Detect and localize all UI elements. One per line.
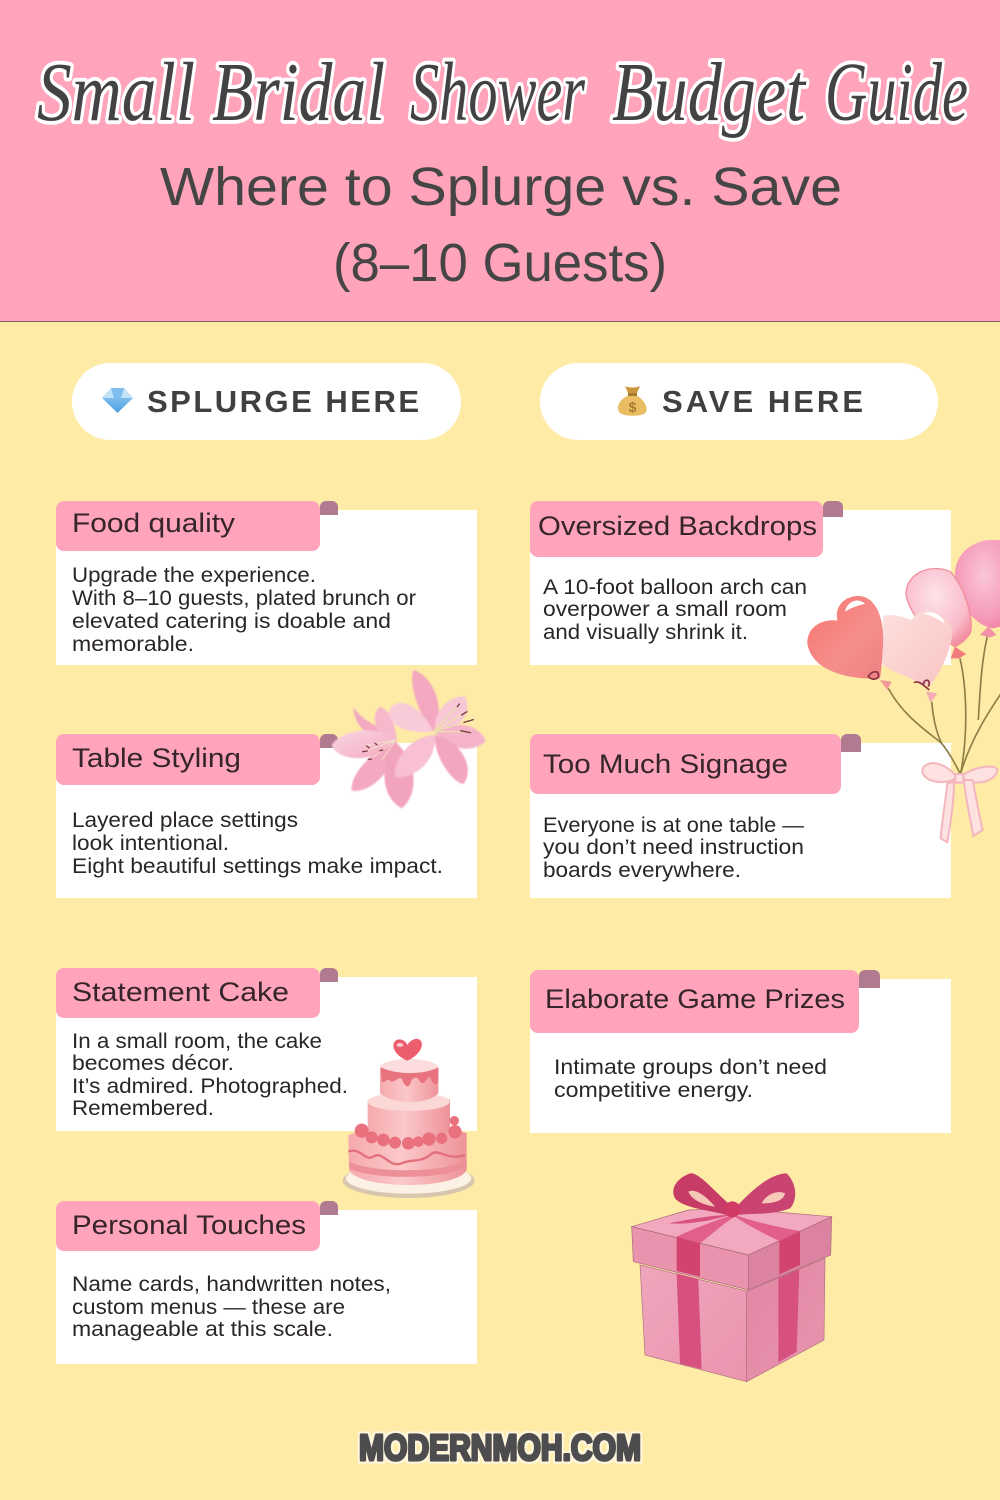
panel: statement cake: In a small room, the cake — [72, 1030, 322, 1053]
title: Small — [37, 47, 195, 139]
pill: save here — [540, 363, 938, 440]
panel: personal touches: Name cards, handwritten notes, — [72, 1273, 391, 1296]
panel: oversized backdrops: Oversized Backdrops — [538, 511, 817, 541]
ribbon bow — [922, 763, 997, 842]
title: Shower — [410, 47, 586, 139]
website footer: MODERNMOH.COM — [359, 1427, 641, 1468]
panel: table styling: Eight beautiful settings make impact. — [72, 855, 443, 878]
panel: statement cake: Remembered. — [72, 1097, 214, 1120]
panel: food quality: Food quality — [72, 508, 236, 538]
panel: oversized backdrops: and visually shrink it. — [543, 621, 748, 644]
panel: table styling: look intentional. — [72, 832, 229, 855]
panel: table styling: Table Styling — [72, 743, 241, 773]
panel: elaborate game prizes: Intimate groups don’t need — [554, 1056, 827, 1079]
subtitle: (8–10 Guests) — [333, 233, 667, 293]
header banner — [0, 0, 1000, 322]
panel: too much signage — [530, 734, 951, 898]
panel: elaborate game prizes: Elaborate Game Prizes — [545, 984, 845, 1014]
pill: save here: SAVE HERE — [662, 384, 863, 419]
panel: food quality: Upgrade the experience. — [72, 564, 316, 587]
panel: too much signage: Too Much Signage — [543, 749, 788, 779]
panel: statement cake: becomes décor. — [72, 1052, 234, 1075]
panel: too much signage: Everyone is at one table — — [543, 814, 804, 837]
panel: personal touches — [56, 1201, 477, 1364]
panel: food quality: With 8–10 guests, plated brunch or — [72, 587, 416, 610]
icon: diamond — [102, 388, 133, 413]
title — [37, 47, 968, 139]
panel: statement cake: It’s admired. Photographed. — [72, 1075, 348, 1098]
panel: table styling: Layered place settings — [72, 809, 298, 832]
pill: splurge here — [72, 363, 461, 440]
icon: lily flowers — [332, 670, 486, 808]
panel: statement cake: Statement Cake — [72, 977, 289, 1007]
panel: elaborate game prizes: competitive energy. — [554, 1079, 753, 1102]
title: Bridal — [212, 47, 385, 139]
panel: personal touches: manageable at this scale. — [72, 1318, 333, 1341]
title: Budget — [612, 47, 807, 139]
icon: money bag: $ — [629, 399, 637, 415]
panel: food quality — [56, 501, 477, 665]
panel: oversized backdrops: overpower a small room — [543, 598, 787, 621]
icon: tiered cake — [343, 1039, 475, 1198]
panel: too much signage: boards everywhere. — [543, 859, 741, 882]
icon: gift box — [632, 1173, 832, 1382]
icon: heart balloons — [807, 540, 1000, 842]
balloon strings — [888, 637, 1000, 773]
icon: money bag — [618, 386, 647, 416]
panel: too much signage: you don’t need instruction — [543, 836, 804, 859]
subtitle: Where to Splurge vs. Save — [160, 157, 842, 217]
panel: statement cake — [56, 968, 477, 1131]
panel: elaborate game prizes — [530, 970, 951, 1133]
pill: splurge here: SPLURGE HERE — [147, 384, 419, 419]
panel: table styling — [56, 734, 477, 898]
panel: oversized backdrops — [530, 501, 951, 665]
subtitle — [160, 157, 842, 293]
panel: personal touches: Personal Touches — [72, 1210, 306, 1240]
panel: food quality: elevated catering is doable and — [72, 610, 391, 633]
panel: food quality: memorable. — [72, 633, 194, 656]
panel: oversized backdrops: A 10-foot balloon arch can — [543, 576, 807, 599]
panel: personal touches: custom menus — these are — [72, 1296, 345, 1319]
